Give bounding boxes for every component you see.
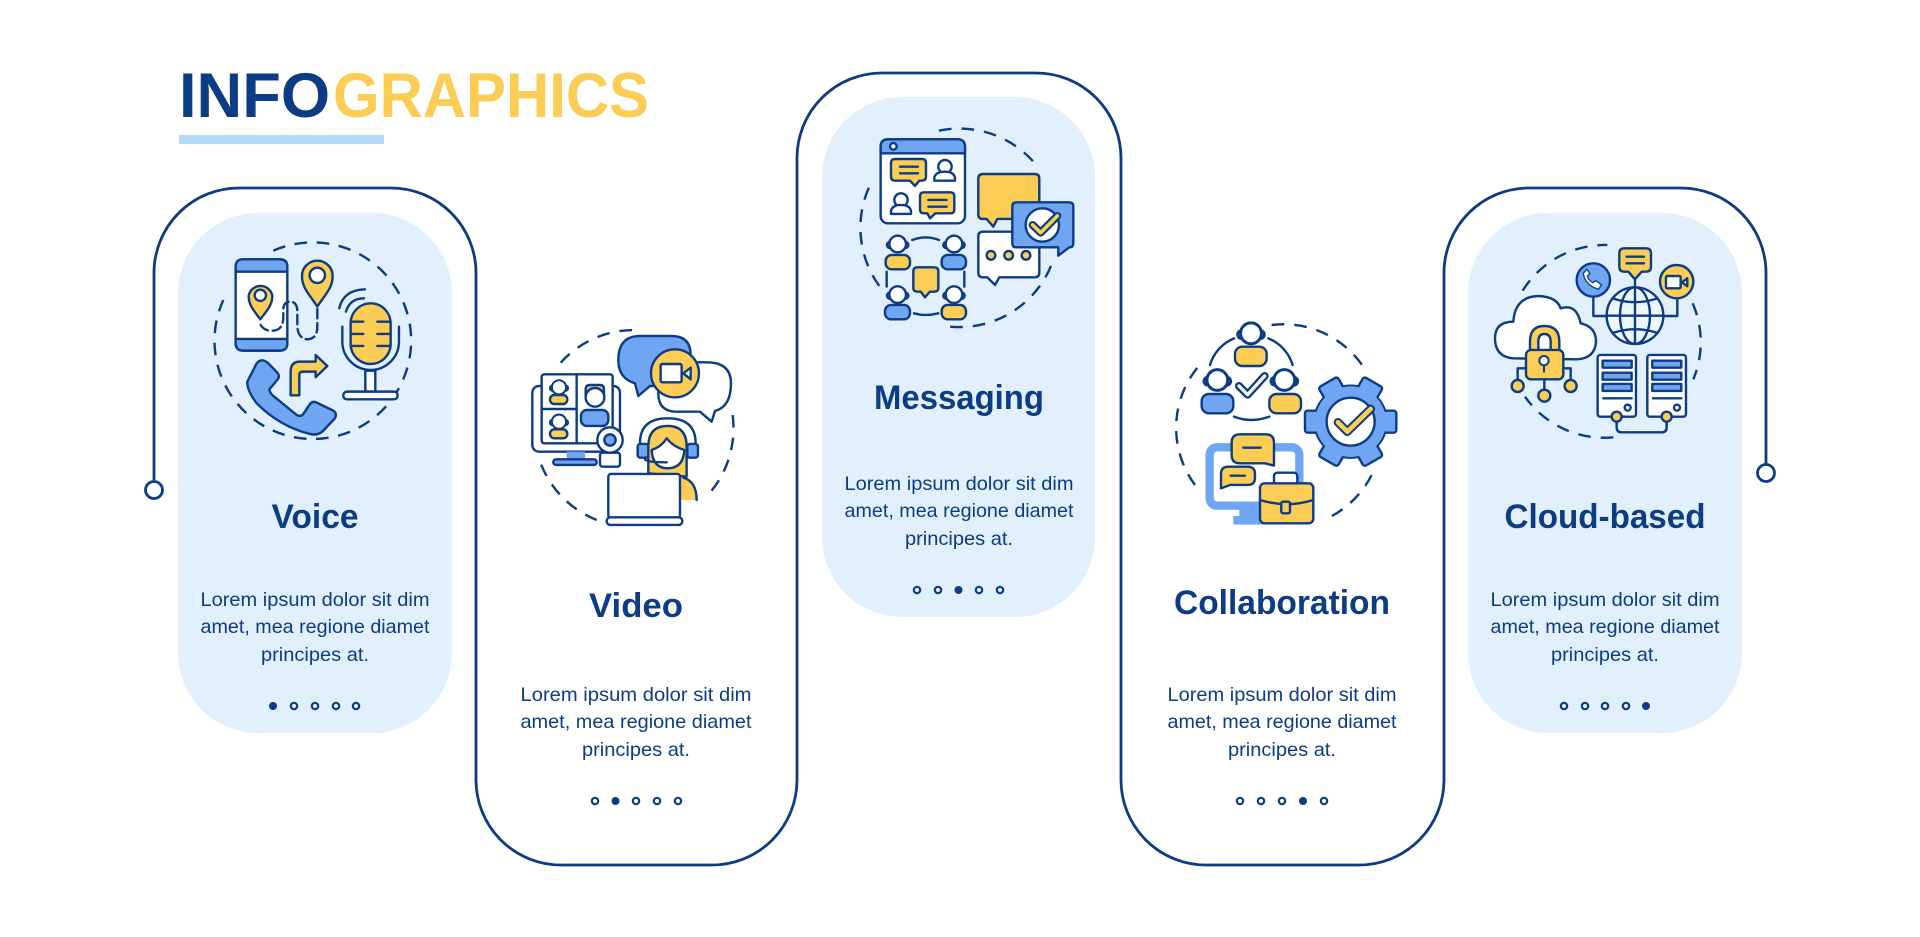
icon: phone, location pins and microphone bbox=[215, 242, 411, 439]
text block: Cloud-based bbox=[1490, 589, 1720, 666]
text block: Messaging: Lorem ipsum dolor sit dim bbox=[844, 473, 1074, 495]
connector outline around panels bbox=[146, 73, 1774, 865]
pagination dots: Voice bbox=[269, 702, 359, 710]
panel background: Voice bbox=[178, 213, 452, 733]
title bbox=[179, 61, 649, 131]
text block: Collaboration bbox=[1168, 684, 1397, 761]
panel: Cloud-based bbox=[1468, 213, 1742, 733]
pagination dots: Cloud-based bbox=[1561, 702, 1650, 710]
heading: Voice: Voice bbox=[272, 498, 358, 536]
icon: chat window, group and speech bubbles bbox=[860, 129, 1073, 327]
text block: Messaging: principes at. bbox=[905, 528, 1013, 550]
text block: Voice bbox=[200, 589, 430, 666]
text block: Video: principes at. bbox=[582, 739, 690, 761]
text block: Voice: amet, mea regione diamet bbox=[200, 616, 430, 638]
text block: Voice: Lorem ipsum dolor sit dim bbox=[200, 589, 430, 611]
icon: video call, monitor and operator bbox=[532, 330, 734, 525]
heading: Cloud-based: Cloud-based bbox=[1504, 498, 1706, 536]
text block: Cloud-based: principes at. bbox=[1551, 644, 1659, 666]
text block: Video bbox=[520, 684, 752, 761]
text block: Collaboration: principes at. bbox=[1228, 739, 1336, 761]
heading: Collaboration: Collaboration bbox=[1174, 584, 1390, 622]
text block: Cloud-based: amet, mea regione diamet bbox=[1490, 616, 1720, 638]
panel background: Cloud-based bbox=[1468, 213, 1742, 733]
pagination dots: Collaboration bbox=[1237, 797, 1327, 805]
text block: Video: amet, mea regione diamet bbox=[520, 711, 752, 733]
panel: Voice bbox=[178, 213, 452, 733]
panel: Collaboration bbox=[1168, 323, 1397, 805]
icon: cloud, lock, globe and servers bbox=[1495, 245, 1701, 438]
panel: Video bbox=[520, 330, 752, 805]
panel: Messaging bbox=[822, 97, 1095, 617]
text block: Collaboration: amet, mea regione diamet bbox=[1168, 711, 1397, 733]
icon: team, gear, monitor and briefcase bbox=[1176, 323, 1396, 524]
title: INFO bbox=[179, 61, 330, 131]
text block: Messaging: amet, mea regione diamet bbox=[844, 500, 1074, 522]
title underline bbox=[179, 135, 384, 144]
text block: Video: Lorem ipsum dolor sit dim bbox=[520, 684, 752, 706]
text block: Collaboration: Lorem ipsum dolor sit dim bbox=[1168, 684, 1396, 706]
heading: Video: Video bbox=[589, 587, 683, 625]
text block: Voice: principes at. bbox=[261, 644, 369, 666]
pagination dots: Video bbox=[592, 797, 681, 805]
text block: Cloud-based: Lorem ipsum dolor sit dim bbox=[1490, 589, 1720, 611]
pagination dots: Messaging bbox=[914, 586, 1003, 594]
text block: Messaging bbox=[844, 473, 1074, 550]
heading: Messaging: Messaging bbox=[874, 379, 1044, 417]
panel background: Messaging bbox=[822, 97, 1095, 617]
title: GRAPHICS bbox=[333, 61, 649, 131]
